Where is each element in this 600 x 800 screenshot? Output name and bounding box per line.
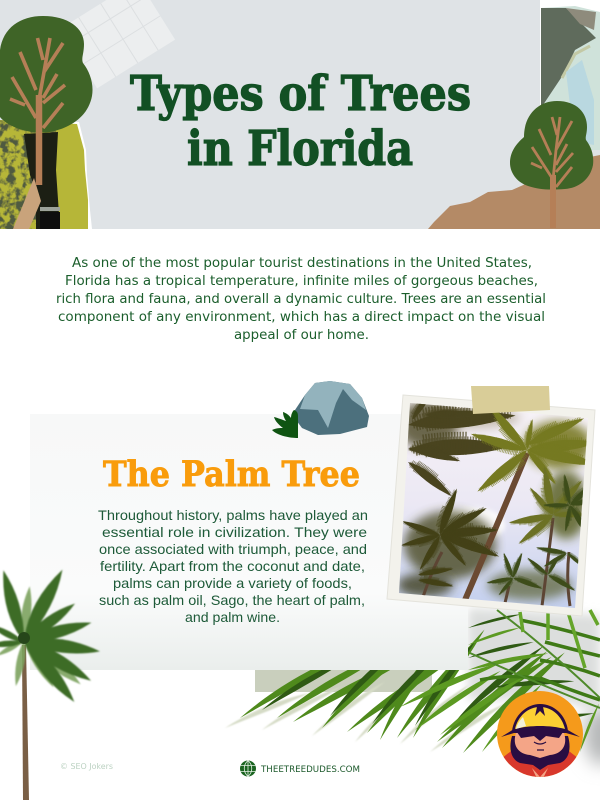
photo: polaroid of palm trees [387, 389, 600, 616]
intro paragraph: rich flora and fauna, and overall a dynamic culture. Trees are an essential [56, 292, 546, 307]
mid left crown [400, 487, 501, 589]
intro paragraph: appeal of our home. [234, 328, 369, 343]
palm tree body text [98, 507, 368, 625]
icon: globe [240, 760, 256, 776]
website url: THEETREEDUDES.COM [260, 765, 360, 775]
palm tree body text: and palm wine. [185, 609, 280, 625]
palm tree body text: once associated with triumph, peace, and [99, 541, 367, 557]
copyright note: © SEO Jokers [60, 762, 113, 771]
heading: the palm tree: The Palm Tree [103, 454, 360, 495]
helmet brim [501, 730, 580, 737]
intro paragraph: Florida has a tropical temperature, infinite miles of gorgeous beaches, [65, 274, 538, 289]
palm tree illustration [0, 566, 101, 800]
glasses and mouth [518, 733, 562, 741]
right crowns [508, 468, 582, 544]
icon: right tree [510, 101, 593, 228]
title: Types of Trees [130, 66, 471, 122]
title: in Florida [187, 121, 413, 177]
palm tree body text: Throughout history, palms have played an [98, 507, 368, 523]
palm tree body text: palms can provide a variety of foods, [113, 575, 352, 591]
palm tree body text: essential role in civilization. They were [102, 524, 367, 540]
shirt collar [532, 768, 548, 777]
beard [510, 736, 570, 770]
palm trunks [465, 453, 527, 600]
shirt [504, 751, 576, 777]
palm tree body text: such as palm oil, Sago, the heart of palm, [99, 592, 365, 608]
palm fronds: bottom right foliage [225, 607, 600, 765]
icon: rock with plant [272, 381, 369, 438]
collage: brown torn paper [428, 155, 600, 229]
top left crown [408, 404, 516, 496]
title [130, 66, 471, 177]
intro paragraph: component of any environment, which has a direct impact on the visual [58, 310, 545, 325]
collage: grass photo [0, 120, 92, 229]
main crown [470, 412, 586, 492]
icon: left tree [0, 16, 93, 185]
palm tree body text: fertility. Apart from the coconut and date, [100, 558, 365, 574]
intro paragraph: As one of the most popular tourist destinations in the United States, [72, 256, 532, 271]
grid paper scrap [60, 0, 175, 88]
tape on photo [471, 386, 550, 414]
intro paragraph [56, 256, 546, 343]
logo: hard hat lumberjack badge [497, 691, 583, 777]
face [515, 733, 565, 758]
panel: palm tree card [30, 414, 468, 670]
collage: coastline photo [540, 0, 600, 150]
helmet dome [512, 704, 568, 731]
header background [0, 0, 600, 229]
